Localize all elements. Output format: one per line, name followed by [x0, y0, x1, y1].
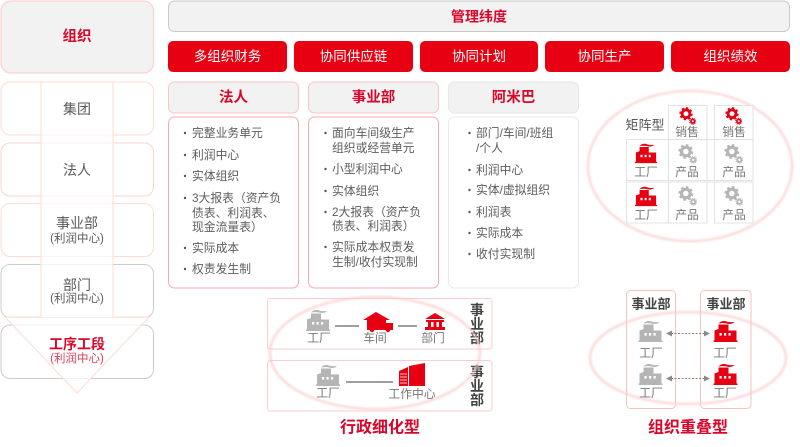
panel body: 法人 attributes: 3大报表（资产负 — [192, 191, 281, 205]
panel body: 阿米巴 attributes: 利润中心 — [476, 163, 523, 177]
panel body: 法人 attributes: 完整业务单元 — [192, 126, 263, 140]
title: 组织重叠型: 组织重叠型 — [648, 418, 728, 436]
panel body: 阿米巴 attributes: /个人 — [476, 141, 503, 155]
cell: 产品 row 1 col 2 — [722, 145, 746, 179]
highlight ellipse: overlap — [590, 312, 786, 404]
icon: workshop with label: 车间 — [363, 331, 387, 345]
cell: 工厂 row 2 — [634, 187, 658, 222]
label: 事业部 利润中心: (利润中心) — [50, 231, 104, 245]
cell: 销售 2 — [722, 108, 746, 139]
cell: 工厂 row 1: 工厂 — [634, 165, 658, 179]
icon: gray factory with label: 工厂 — [307, 331, 331, 345]
title: 行政细化型: 行政细化型 — [340, 418, 420, 436]
highlight ellipse: matrix — [588, 91, 792, 241]
cell: 工厂 row 2: 工厂 — [634, 208, 658, 222]
panel body: 事业部 attributes: 组织或经营单元 — [332, 141, 415, 155]
panel body: 法人 attributes: 实体组织 — [192, 169, 239, 183]
icon: gray factory with label — [306, 310, 331, 345]
cell: 销售 2: 销售 — [722, 125, 746, 139]
arrow: downward through levels — [5, 82, 149, 393]
label: 法人: 法人 — [63, 162, 91, 178]
icon: department building with label — [421, 313, 445, 345]
panel body: 事业部 attributes: 债表、利润表） — [332, 219, 415, 233]
panel body: 事业部 attributes — [308, 117, 438, 288]
cell: 产品 row 1 col 2: 产品 — [722, 165, 746, 179]
icon: gray factory top — [638, 321, 663, 360]
heading: 组织: 组织 — [62, 28, 92, 45]
arrow: bottom dashed two-way — [666, 376, 710, 382]
column box 1: 事业部: 事业部 — [631, 296, 671, 312]
icon: gray factory 2 with label: 工厂 — [316, 386, 340, 400]
icon: gray factory bottom: 工厂 — [639, 386, 663, 400]
panel body: 法人 attributes: 债表、利润表、 — [192, 206, 275, 220]
panel body: 法人 attributes: 实际成本 — [192, 241, 239, 255]
label: 事业部 利润中心 — [50, 215, 104, 245]
cell: 产品 row 2 col 1: 产品 — [675, 208, 699, 222]
cell: 销售 1: 销售 — [675, 125, 699, 139]
administrative refinement diagram — [268, 297, 492, 436]
cell: 产品 row 2 col 1 — [675, 187, 699, 222]
column box 2: 事业部: 事业部 — [706, 296, 746, 312]
column box 1: 事业部 — [626, 290, 676, 408]
tab: 组织绩效 — [671, 41, 790, 72]
panel body: 阿米巴 attributes: 收付实现制 — [476, 247, 535, 261]
panel body: 事业部 attributes: 实体组织 — [332, 184, 379, 198]
cell: 工厂 row 1 — [634, 144, 658, 179]
connector — [335, 325, 359, 327]
label: 部门 利润中心 — [50, 277, 104, 305]
matrix type diagram — [588, 91, 792, 241]
panel body: 事业部 attributes: 2大报表（资产负 — [332, 205, 421, 219]
tab: 协同供应链 — [294, 41, 413, 72]
row box 2: 事业部: 事 — [470, 364, 484, 380]
row box 2: 事业部: 部 — [470, 392, 484, 408]
tab: 协同计划 — [420, 41, 538, 72]
label: 部门 利润中心: 部门 — [63, 277, 91, 293]
connector — [398, 325, 417, 327]
label: 工序工段 利润中心 — [49, 336, 105, 365]
row box 2: 事业部: 业 — [470, 378, 484, 394]
level boxes — [1, 82, 154, 378]
overlap type diagram — [590, 290, 786, 436]
icon: gray factory top: 工厂 — [639, 346, 663, 360]
icon: red factory bottom: 工厂 — [713, 386, 737, 400]
icon: workshop with label — [363, 312, 393, 345]
cell: 产品 row 1 col 1: 产品 — [675, 165, 699, 179]
label: 集团: 集团 — [63, 101, 91, 117]
tab: 协同供应链: 协同供应链 — [320, 48, 388, 64]
red management tabs — [168, 41, 790, 72]
panel heading: 法人 — [168, 82, 298, 113]
panel body: 法人 attributes: 现金流量表） — [192, 220, 263, 234]
tab: 协同计划: 协同计划 — [452, 49, 506, 64]
icon: gray factory 2 with label — [316, 365, 340, 400]
label: 矩阵型: 矩阵型 — [625, 118, 665, 132]
panel heading: 阿米巴: 阿米巴 — [492, 89, 535, 106]
icon: red factory top — [713, 321, 738, 360]
label: 事业部 利润中心: 事业部 — [56, 215, 98, 231]
tab: 协同生产: 协同生产 — [578, 49, 632, 64]
tab: 协同生产 — [545, 41, 664, 72]
tab: 多组织财务: 多组织财务 — [194, 48, 261, 64]
heading bar: 管理纬度 — [168, 1, 790, 32]
heading bar: 管理纬度: 管理纬度 — [451, 8, 507, 24]
row box 1: 事业部 — [268, 298, 492, 349]
matrix grid — [626, 106, 753, 223]
label: 工序工段 利润中心: 工序工段 — [49, 336, 105, 352]
panel body: 阿米巴 attributes: 利润表 — [476, 205, 512, 219]
panel body: 事业部 attributes: 生制/收付实现制 — [332, 255, 418, 269]
panel: 事业部 — [308, 82, 438, 288]
panel body: 阿米巴 attributes: 部门/车间/班组 — [476, 126, 554, 140]
panel body: 阿米巴 attributes: 实体/虚拟组织 — [476, 183, 550, 197]
highlight ellipse: refinement — [270, 297, 480, 409]
cell: 产品 row 1 col 1 — [675, 145, 699, 179]
panel: 法人 — [168, 82, 298, 288]
icon: department building with label: 部门 — [421, 331, 445, 345]
panel: 阿米巴 — [448, 82, 578, 288]
panel heading: 事业部: 事业部 — [352, 88, 396, 106]
cell: 产品 row 2 col 2 — [722, 187, 746, 222]
panel heading: 事业部 — [308, 82, 438, 113]
label: 部门 利润中心: (利润中心) — [50, 291, 104, 305]
icon: work center with label — [388, 363, 436, 401]
icon: gray factory bottom — [638, 364, 663, 400]
row box 1: 事业部: 部 — [470, 330, 484, 346]
panel body: 事业部 attributes: 小型利润中心 — [332, 162, 403, 176]
connector — [346, 381, 393, 383]
panel body: 法人 attributes: 权责发生制 — [192, 262, 251, 276]
tab: 组织绩效: 组织绩效 — [704, 49, 758, 64]
icon: red factory top: 工厂 — [713, 346, 737, 360]
cell: 销售 1 — [675, 108, 699, 139]
panel body: 阿米巴 attributes: 实际成本 — [476, 226, 523, 240]
panel body: 阿米巴 attributes — [448, 117, 578, 288]
icon: red factory bottom — [713, 364, 738, 400]
row box 1: 事业部: 业 — [470, 316, 484, 332]
icon: work center with label: 工作中心 — [388, 387, 436, 401]
panel body: 法人 attributes — [168, 117, 298, 288]
row box 1: 事业部: 事 — [470, 302, 484, 318]
left column: organisation levels — [1, 1, 154, 393]
cell: 产品 row 2 col 2: 产品 — [722, 208, 746, 222]
column box 2: 事业部 — [700, 290, 751, 408]
label: 工序工段 利润中心: (利润中心) — [50, 351, 104, 365]
panel body: 事业部 attributes: 面向车间级生产 — [332, 126, 415, 140]
row box 2: 事业部 — [268, 360, 492, 411]
tab: 多组织财务 — [168, 41, 287, 72]
panel body: 法人 attributes: 利润中心 — [192, 148, 239, 162]
panel heading: 法人: 法人 — [219, 88, 248, 106]
arrow: top dashed two-way — [666, 330, 710, 336]
panel heading: 阿米巴 — [448, 82, 578, 113]
heading: 组织 — [1, 1, 154, 73]
panel body: 事业部 attributes: 实际成本权责发 — [332, 240, 415, 254]
